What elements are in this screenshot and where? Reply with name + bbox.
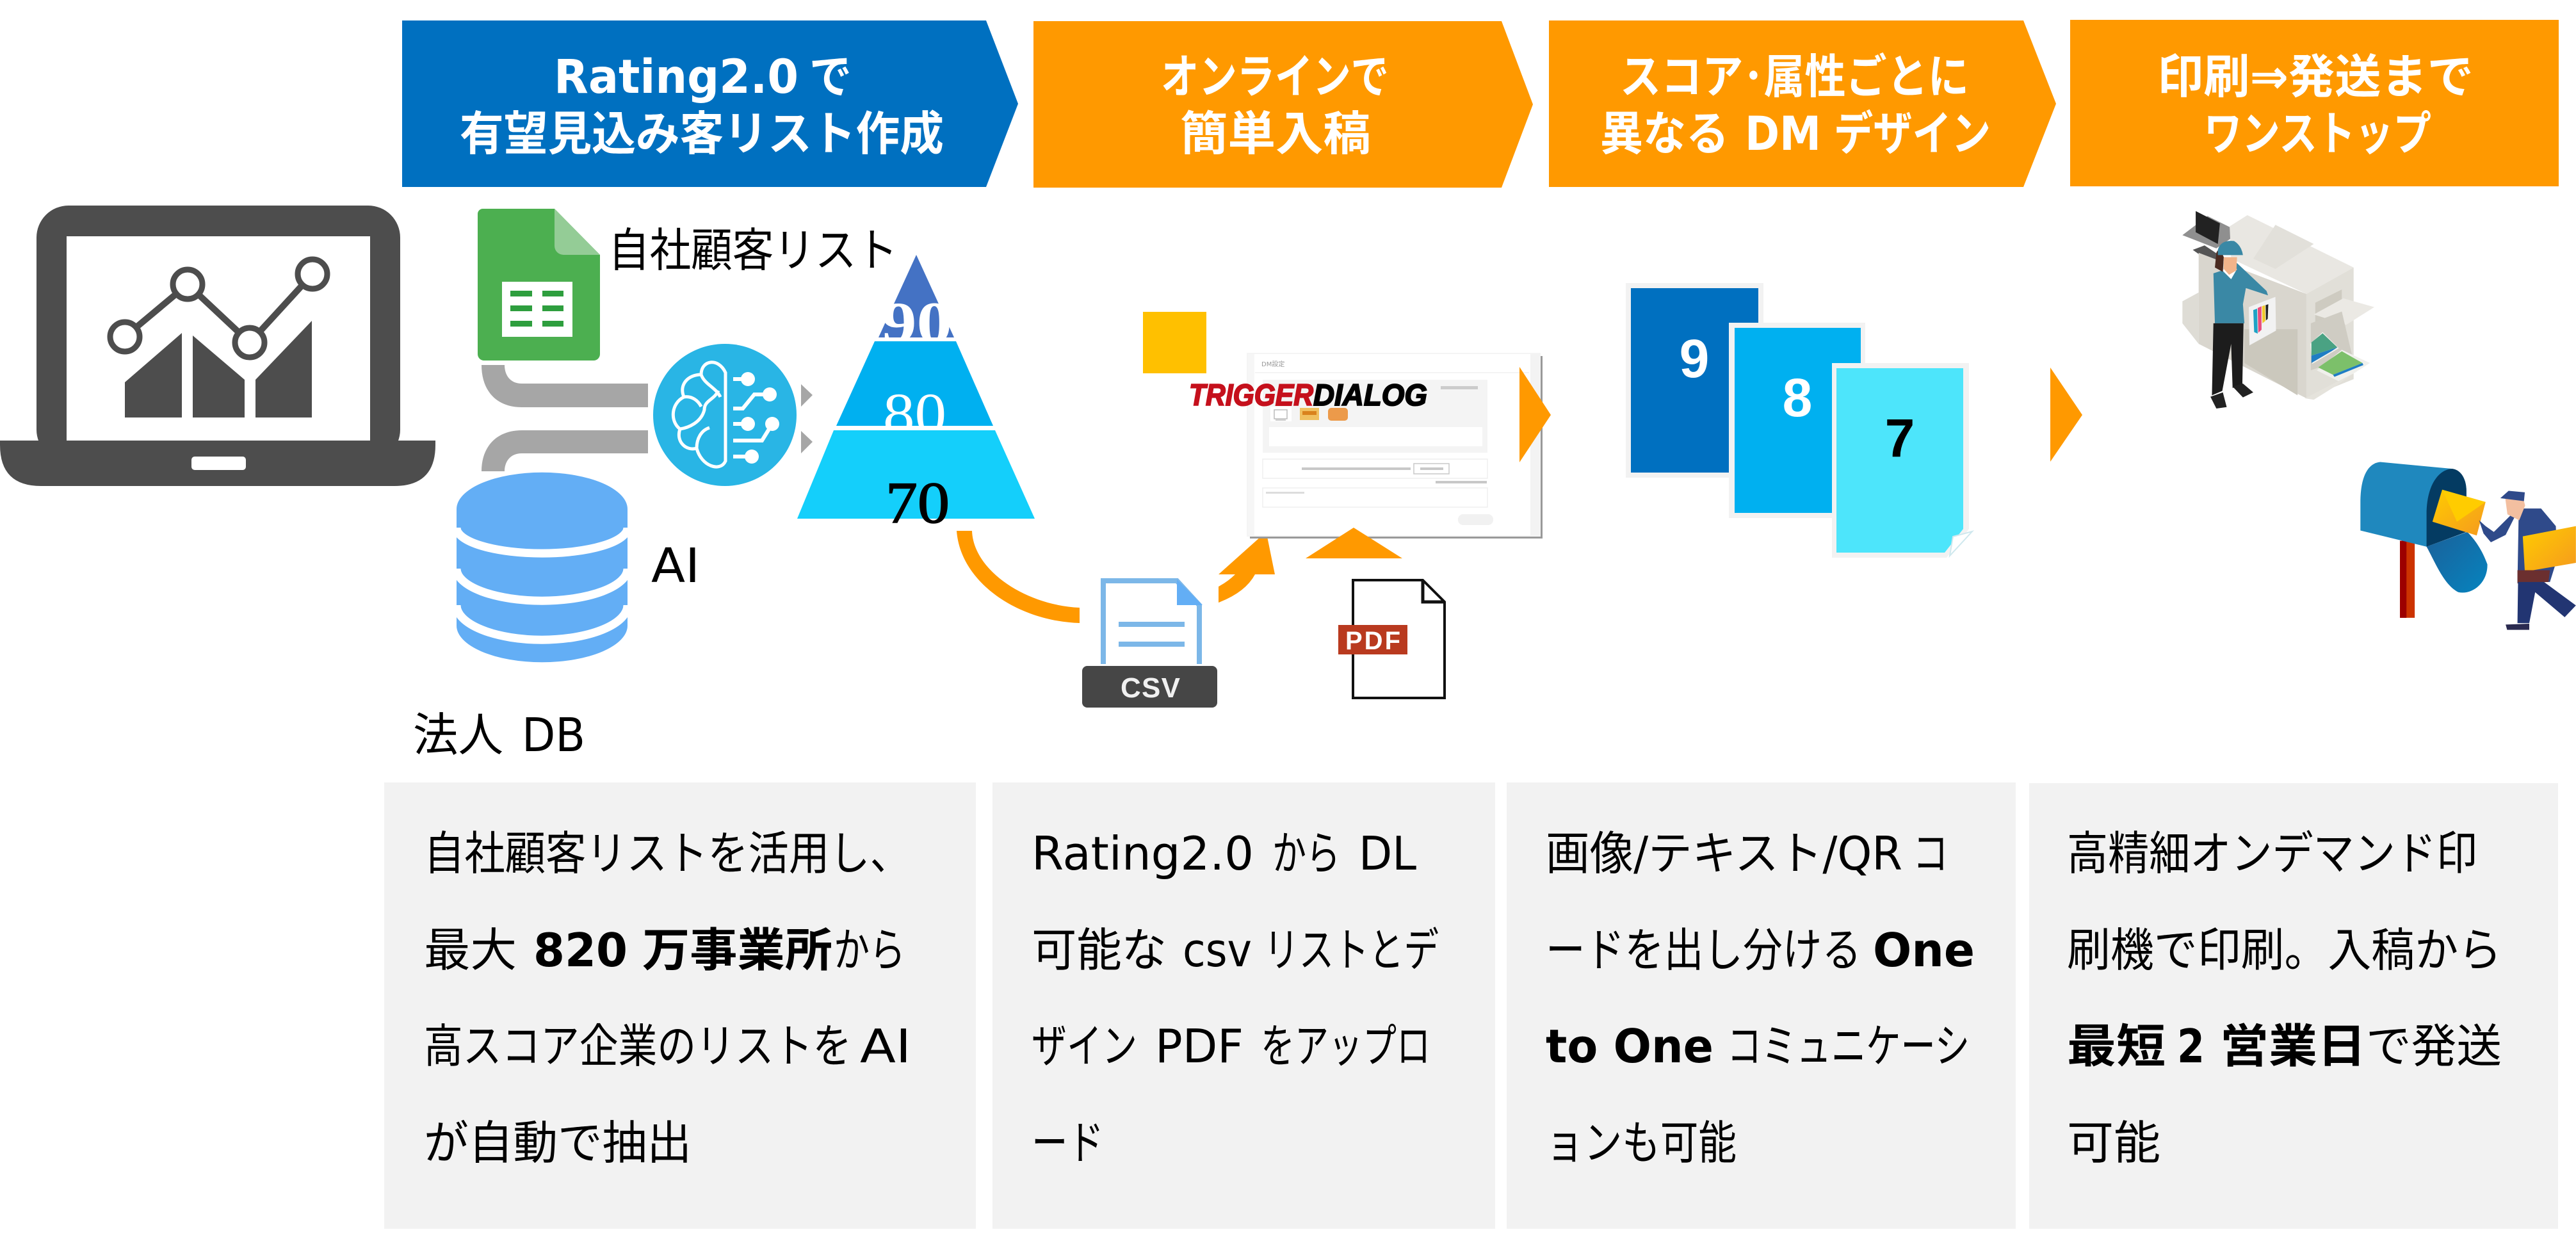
panel: description 4: 刷機で印刷。入稿から [2067, 923, 2502, 977]
logo: TRIGGERDIALOG: TRIGGER [1189, 378, 1313, 412]
panel: description 1: が自動で抽出 [424, 1116, 692, 1170]
icon: DM design stack score 9: 9 [1680, 328, 1709, 389]
panel: description 3: to One [1546, 1019, 1713, 1073]
icon: DM design stack score 9 [1626, 283, 1763, 478]
panel: description 3: コ [1913, 827, 1948, 880]
header: online submission [1033, 21, 1533, 188]
panel: description 3: ョンも可能 [1546, 1116, 1737, 1170]
header: one-stop printing and shipping [2070, 20, 2559, 186]
icon: mailbox with postman [2360, 462, 2576, 630]
chart: score pyramid: 90 [881, 290, 952, 355]
arrow: to DM designs [1519, 367, 1551, 462]
header: DM design per score [1549, 20, 2056, 187]
arrow: PDF to upload screen [1306, 528, 1402, 558]
arrow: CSV to upload screen [1219, 537, 1275, 603]
panel: description 1: から [834, 923, 905, 977]
panel: description 3: コミュニケーシ [1727, 1019, 1970, 1073]
header: DM design per score: スコア･属性ごとに [1620, 50, 1969, 104]
panel: description 2: ザイン [1032, 1019, 1137, 1073]
panel: description 1: 万事業所 [642, 923, 832, 977]
panel: description 2: から [1272, 827, 1340, 880]
chart: score pyramid [797, 255, 1035, 535]
header: online submission: 簡単入稿 [1180, 107, 1371, 161]
label: own customer list: 自社顧客リスト [608, 223, 898, 277]
icon: printer with operator [2182, 211, 2374, 409]
arrow: grey upper [801, 384, 813, 407]
panel: upload screen: DM設定 [1261, 361, 1284, 368]
panel: description 4: 営業日 [2220, 1019, 2366, 1073]
label: corporate DB: 法人 [413, 708, 503, 762]
panel: description 2: 可能な [1032, 923, 1167, 977]
icon: PDF file: PDF [1345, 627, 1400, 655]
panel: description 2: ード [1032, 1116, 1104, 1170]
icon: CSV file: CSV [1121, 672, 1181, 704]
logo: TRIGGERDIALOG: DIALOG [1313, 378, 1427, 412]
panel: description 4 [2029, 783, 2558, 1229]
panel: description 2: PDF [1155, 1019, 1243, 1073]
header: DM design per score: デザイン [1834, 107, 1991, 161]
header: Rating2.0 list creation: 有望見込み客リスト作成 [460, 107, 944, 161]
connector: lower grey pipe [482, 430, 648, 471]
icon: AI brain [653, 344, 797, 486]
panel: description 2: DL [1359, 827, 1416, 880]
icon: spreadsheet [478, 209, 600, 361]
label: corporate DB: DB [522, 708, 585, 762]
header: one-stop printing and shipping: ワンストップ [2204, 107, 2431, 161]
arrow: grey lower [801, 431, 813, 453]
label: corporate DB [413, 708, 585, 762]
header: Rating2.0 list creation: Rating2.0 [554, 50, 798, 104]
icon: DM design stack score 8: 8 [1783, 368, 1812, 428]
panel: description 4: 2 [2177, 1019, 2205, 1073]
header: DM design per score: 異なる [1600, 107, 1729, 161]
header: online submission: オンラインで [1161, 50, 1389, 104]
panel: description 2: リストとデ [1264, 923, 1439, 977]
icon: CSV file [1082, 579, 1217, 708]
icon: DM design stack score 7: 7 [1885, 408, 1915, 468]
panel: description 1: 高スコア企業のリストを [424, 1019, 852, 1073]
header: one-stop printing and shipping: 印刷⇒発送まで [2157, 50, 2474, 104]
panel: description 1: 自社顧客リストを活用し、 [424, 827, 911, 880]
header: Rating2.0 list creation: で [809, 50, 852, 104]
connector: upper grey pipe [482, 365, 648, 407]
chart: score pyramid: 70 [886, 470, 950, 535]
icon: DM design stack score 7 [1832, 363, 1972, 558]
panel: description 1: 820 [533, 923, 628, 977]
panel: description 2 [992, 782, 1495, 1229]
icon: yellow square [1143, 312, 1206, 373]
panel: upload screen [1247, 353, 1543, 539]
panel: description 3 [1507, 782, 2016, 1229]
panel: description 1 [384, 782, 976, 1229]
arrow: orange curve from pyramid to CSV [957, 531, 1080, 623]
header: Rating2.0 list creation [402, 20, 1018, 187]
panel: description 3: One [1873, 923, 1975, 977]
panel: description 4: 可能 [2067, 1116, 2160, 1170]
icon: DM design stack score 8 [1729, 323, 1865, 518]
label: AI: AI [651, 539, 700, 594]
icon: laptop with chart [0, 206, 435, 486]
arrow: to printing [2050, 368, 2082, 462]
panel: description 1: 最大 [424, 923, 517, 977]
panel: description 4: 最短 [2067, 1019, 2166, 1073]
chart: score pyramid: 80 [883, 381, 946, 446]
panel: description 4: 高精細オンデマンド印 [2067, 827, 2477, 880]
panel: description 2: Rating2.0 [1032, 827, 1254, 880]
icon: database [457, 473, 628, 662]
panel: description 4: で発送 [2366, 1019, 2502, 1073]
panel: description 2: csv [1183, 923, 1252, 977]
panel: description 2: をアップロ [1261, 1019, 1430, 1073]
panel: description 3: 画像/テキスト/QR [1546, 827, 1902, 880]
panel: description 1: AI [860, 1019, 911, 1073]
icon: PDF file [1338, 580, 1445, 698]
header: DM design per score: DM [1745, 107, 1821, 161]
panel: description 3: ードを出し分ける [1546, 923, 1861, 977]
logo: TRIGGERDIALOG [1189, 378, 1427, 412]
